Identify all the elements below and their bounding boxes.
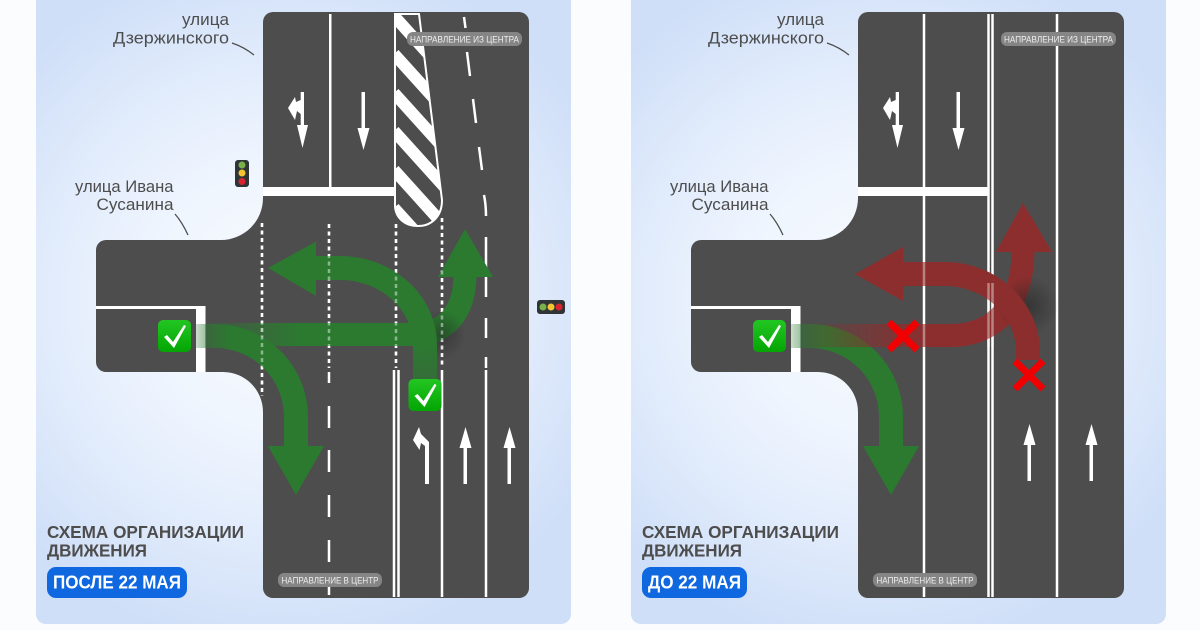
lane arrows: upper [883, 92, 964, 150]
road surface [96, 12, 529, 598]
curved dashed lane [464, 17, 486, 368]
markings showing through arrows [262, 218, 442, 396]
check mark: side road [753, 320, 786, 352]
label: Ivan Susanin street: улица Ивана [75, 178, 174, 196]
label: Ivan Susanin street: Сусанина [692, 196, 769, 214]
direction tag: from center [407, 32, 522, 46]
arrow: right turn from side road [791, 336, 919, 495]
hatched island [394, 13, 443, 227]
traffic light: vertical [235, 160, 249, 187]
label: Dzerzhinsky street: Дзержинского [113, 30, 229, 48]
cross: straight [889, 322, 917, 350]
lane arrows: lower [1024, 424, 1098, 481]
label: Ivan Susanin street: улица Ивана [670, 178, 769, 196]
label: Ivan Susanin street [75, 178, 188, 235]
road surface [691, 12, 1124, 598]
label: Ivan Susanin street [670, 178, 783, 235]
cross: U-turn [1015, 361, 1043, 389]
heading [47, 522, 244, 560]
label: Dzerzhinsky street [113, 11, 254, 55]
shadow of arrow overlap [998, 276, 1058, 336]
road markings: stop line [858, 187, 988, 196]
direction tag: from center: НАПРАВЛЕНИЕ ИЗ ЦЕНТРА [410, 34, 520, 44]
lane arrows: upper [288, 92, 370, 150]
road markings: side road [691, 306, 800, 372]
direction tag: from center [1001, 32, 1116, 46]
heading: ДВИЖЕНИЯ [642, 540, 742, 560]
lower lane lines [329, 370, 486, 597]
direction tag: to center [278, 573, 382, 587]
dotted intersection lines [262, 218, 442, 396]
date badge: ДО 22 МАЯ [648, 572, 741, 592]
markings showing through arrows [924, 262, 992, 347]
label: Dzerzhinsky street: Дзержинского [708, 30, 824, 48]
heading: ДВИЖЕНИЯ [47, 540, 147, 560]
lane lines [924, 14, 1057, 597]
panel: after 22 May [36, 0, 571, 624]
check mark: side road [158, 320, 191, 352]
heading: СХЕМА ОРГАНИЗАЦИИ [47, 522, 244, 542]
arrow: forbidden U-turn [855, 247, 1028, 360]
direction tag: from center: НАПРАВЛЕНИЕ ИЗ ЦЕНТРА [1004, 34, 1114, 44]
date badge [47, 567, 187, 598]
panel: before 22 May [631, 0, 1166, 624]
lane arrows: lower [413, 427, 516, 484]
direction tag: to center: НАПРАВЛЕНИЕ В ЦЕНТР [282, 576, 378, 586]
road markings: side road [96, 306, 206, 372]
label: Dzerzhinsky street: улица [182, 11, 230, 29]
arrow: right turn from side road [196, 336, 324, 495]
date badge: ПОСЛЕ 22 МАЯ [53, 572, 181, 592]
direction tag: to center: НАПРАВЛЕНИЕ В ЦЕНТР [876, 576, 974, 586]
check mark: left lane [408, 379, 442, 411]
arrow: forbidden straight then forward [805, 203, 1052, 336]
arrow: straight then left-forward [205, 229, 493, 334]
arrow: U-turn to the left [268, 242, 425, 382]
heading: СХЕМА ОРГАНИЗАЦИИ [642, 522, 839, 542]
label: Dzerzhinsky street [708, 11, 849, 55]
road markings: stop line and lane [263, 14, 394, 196]
shadow of arrow overlap [416, 310, 466, 360]
label: Dzerzhinsky street: улица [777, 11, 825, 29]
label: Ivan Susanin street: Сусанина [96, 196, 174, 214]
direction tag: to center [873, 573, 977, 587]
heading [642, 522, 839, 560]
date badge [642, 567, 747, 598]
traffic light: horizontal [537, 300, 565, 314]
